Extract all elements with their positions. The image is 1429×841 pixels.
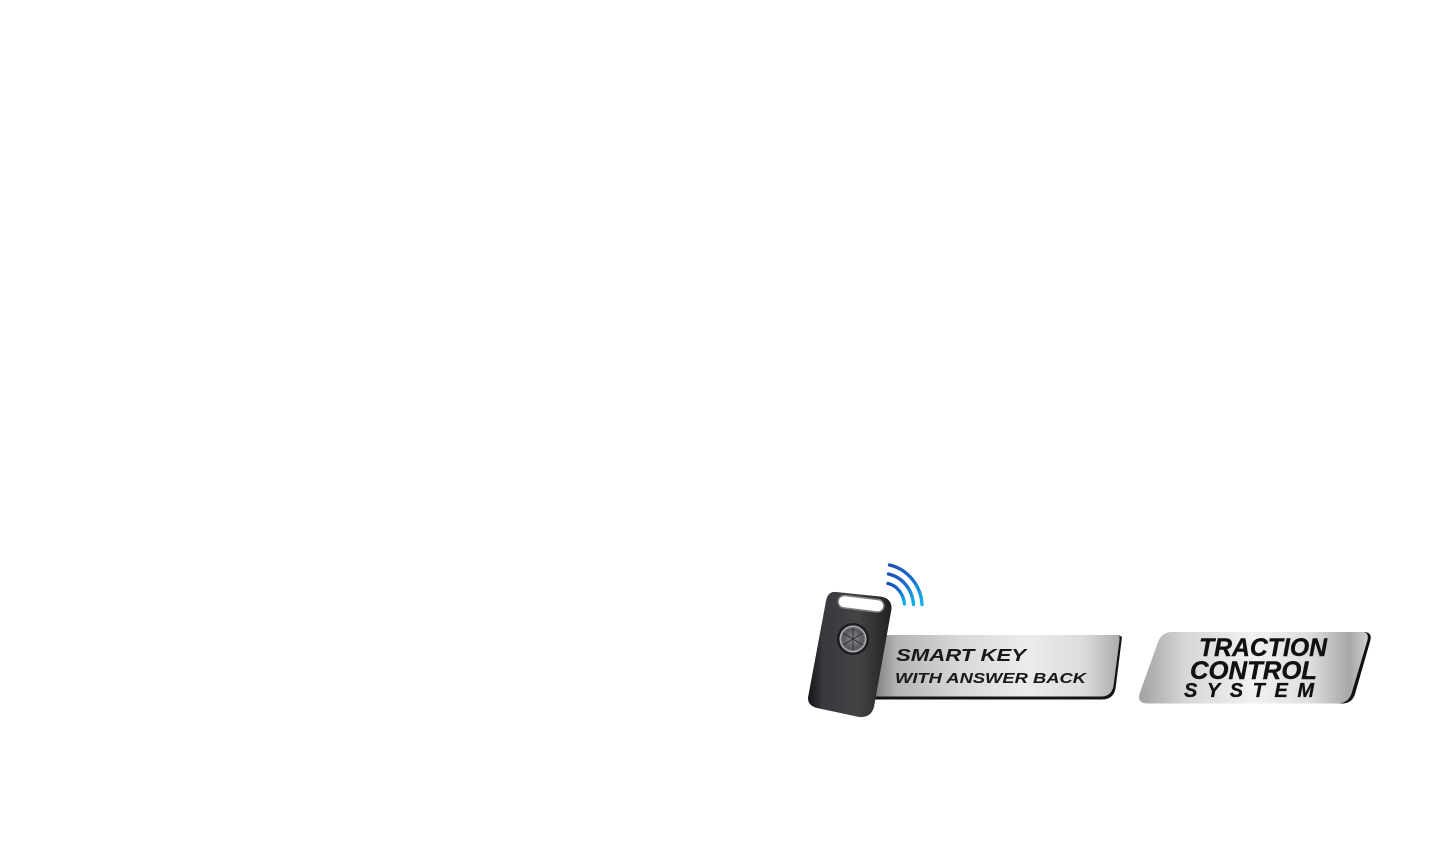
- label: traction: TRACTION: [1199, 634, 1328, 662]
- label: system: SYSTEM: [1184, 680, 1315, 702]
- traction control badge: [1139, 632, 1371, 704]
- smart key badge: [808, 565, 1122, 717]
- key ring slot: [837, 595, 885, 613]
- badge plate: smart key: [872, 635, 1122, 700]
- badge plate: traction control: [1139, 632, 1371, 704]
- label: with answer back: WITH ANSWER BACK: [895, 670, 1087, 687]
- icon: wireless signal waves: [888, 565, 922, 604]
- label: smart key: SMART KEY: [896, 645, 1028, 665]
- label: control: CONTROL: [1190, 657, 1317, 685]
- yamaha emblem: [837, 623, 869, 655]
- icon: key fob: [808, 592, 892, 717]
